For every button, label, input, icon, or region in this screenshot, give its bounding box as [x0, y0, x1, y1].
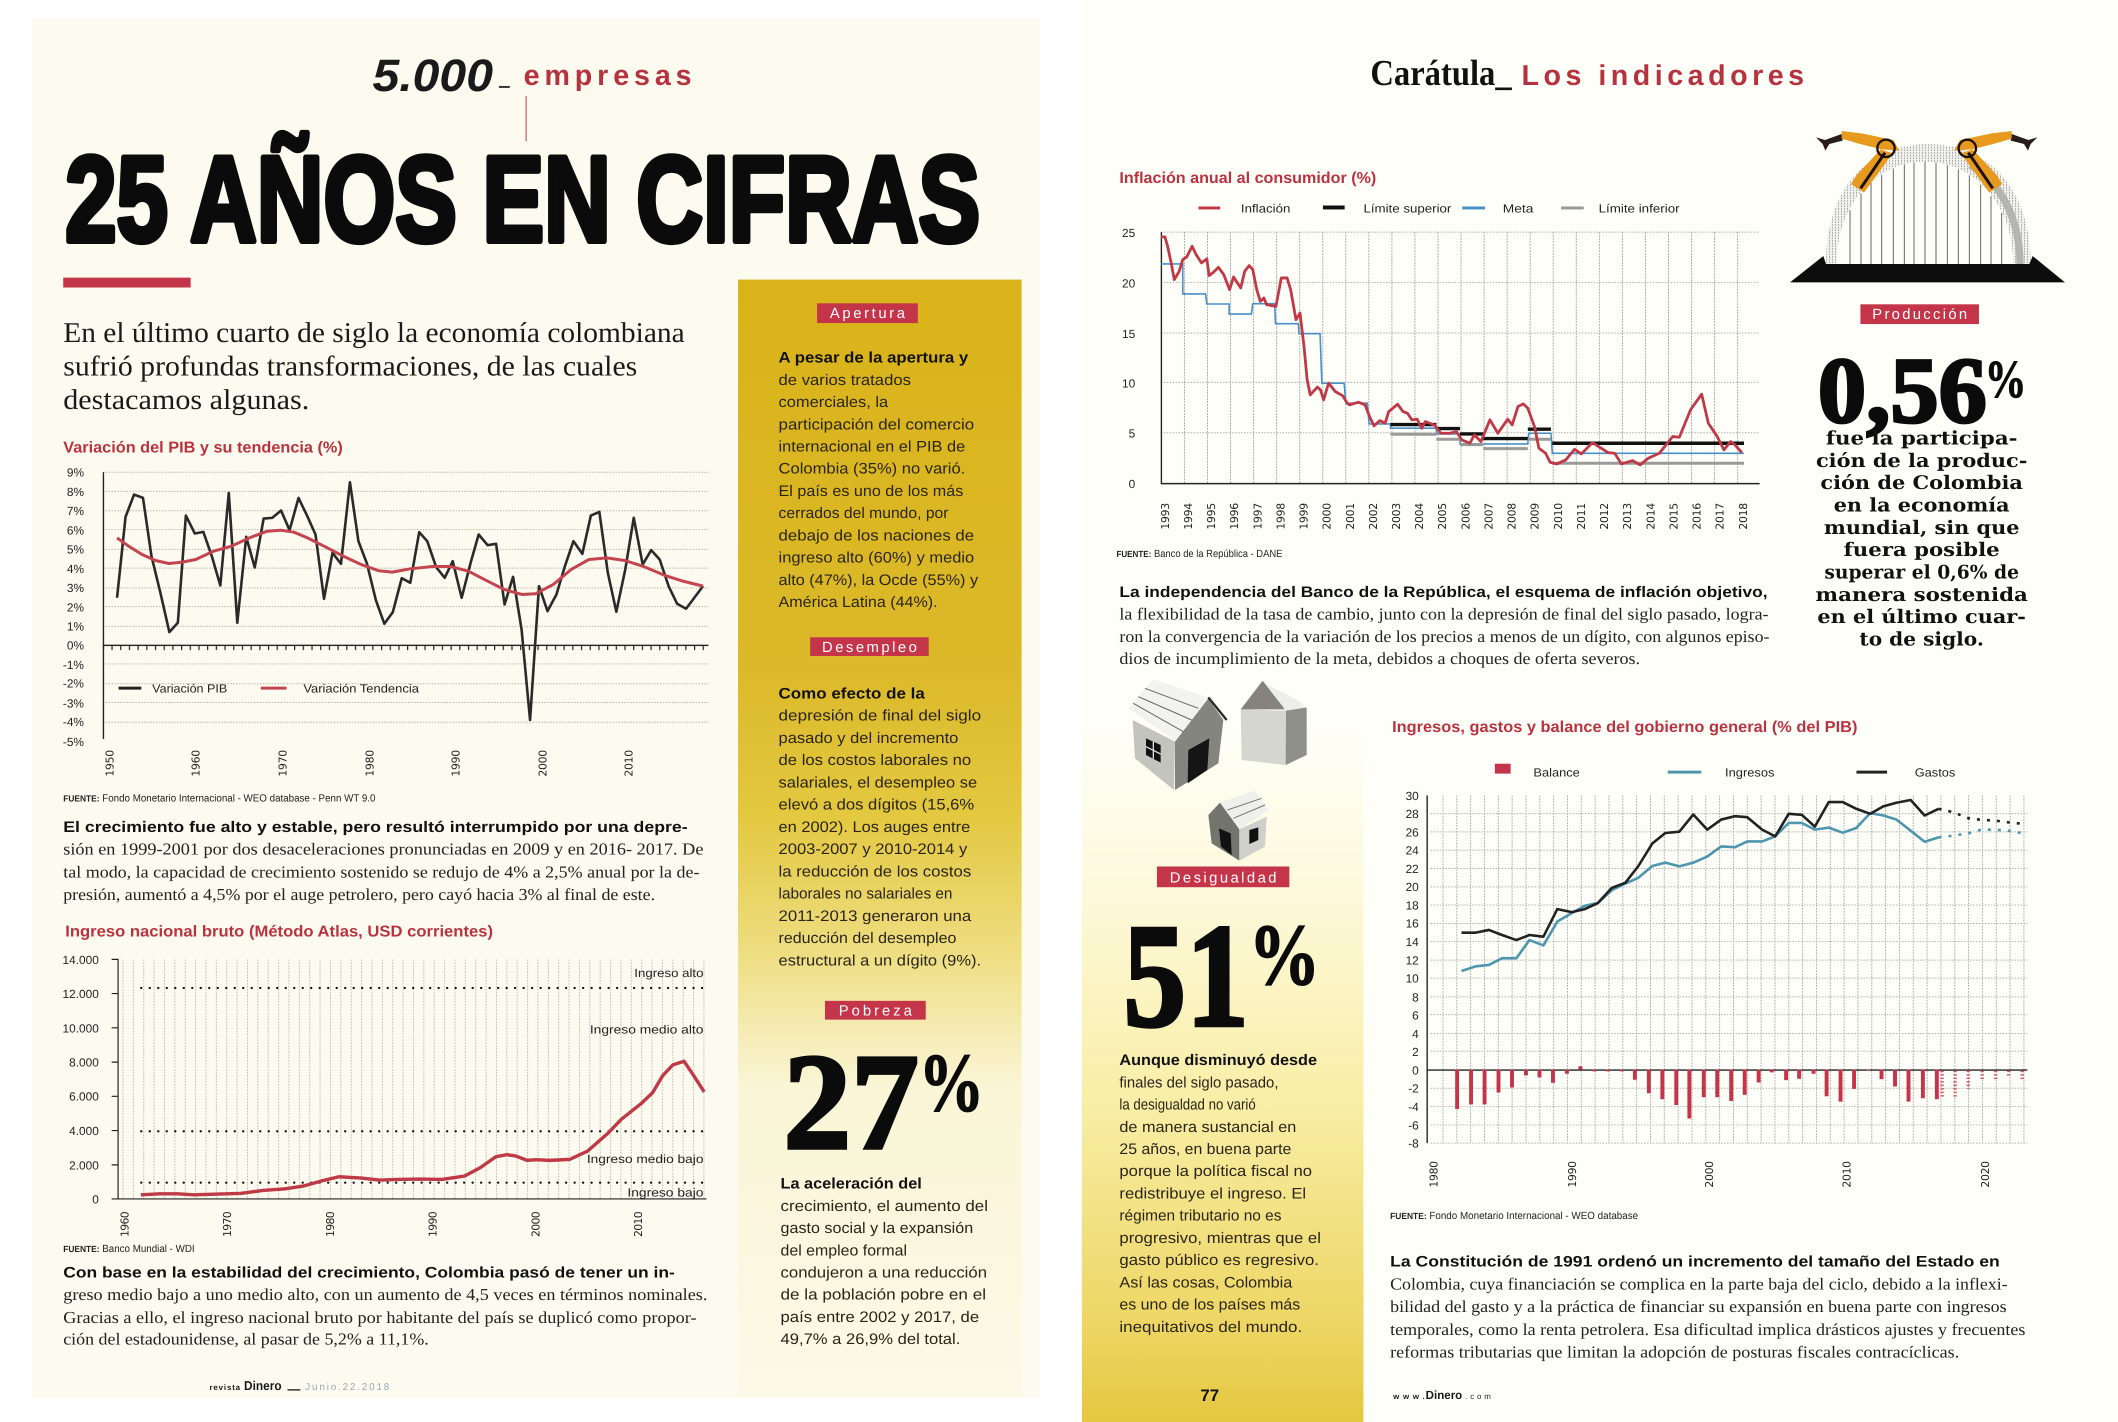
year labels: 1990 — [450, 750, 462, 777]
second house — [1241, 681, 1307, 765]
y axis labels: 10 — [1122, 376, 1136, 390]
y axis labels: 20 — [1122, 277, 1136, 290]
text: desempleo: de los costos laborales no — [779, 752, 971, 769]
big number: 51%: 51 — [1123, 894, 1249, 1058]
text: pobreza: del empleo formal — [781, 1242, 907, 1259]
y axis labels: 4% — [67, 562, 84, 576]
text: desigualdad: porque la política fiscal no — [1119, 1163, 1312, 1180]
income band labels: Ingreso medio bajo — [587, 1152, 704, 1166]
big number: 27% — [783, 1027, 984, 1179]
body text: ingreso: ción del estadounidense, al pasar de 5,2% a 11,1%. — [63, 1330, 429, 1349]
text: desigualdad: es uno de los países más — [1119, 1297, 1300, 1314]
year labels: 1950 — [104, 750, 117, 777]
body text: crecimiento: sión en 1999-2001 por dos desaceleraciones pronunciadas en 2009 y en 2016- 2017. De — [63, 840, 703, 859]
year labels: 2010 — [1841, 1161, 1853, 1188]
text: apertura: El país es uno de los más — [779, 483, 964, 500]
year labels — [1159, 503, 1750, 530]
body text: crecimiento: El crecimiento fue alto y estable, pero resultó interrumpido por una depre- — [63, 819, 688, 836]
body text: constitución — [1390, 1254, 2025, 1361]
y axis labels: 14 — [1406, 935, 1419, 949]
text: desempleo: elevó a dos dígitos (15,6% — [779, 797, 974, 814]
chart legend: inflación: Inflación — [1241, 202, 1290, 215]
tag: Desigualdad — [1157, 866, 1289, 887]
text: desempleo: laborales no salariales en — [779, 886, 952, 903]
big number: 27%: % — [919, 1037, 984, 1129]
year labels: 1990 — [1566, 1161, 1579, 1188]
text: desigualdad: redistribuye el ingreso. El — [1119, 1186, 1306, 1202]
income band labels: Ingreso medio alto — [590, 1023, 704, 1036]
year labels: 2000 — [1321, 503, 1334, 530]
body text: inflación: dios de incumplimiento de la meta, debidos a choques de oferta severos. — [1119, 649, 1640, 668]
y axis labels: 0 — [1129, 477, 1136, 491]
text: desigualdad: progresivo, mientras que el — [1119, 1230, 1321, 1247]
y axis labels: 28 — [1406, 807, 1419, 821]
big number: 51%: % — [1249, 908, 1320, 1004]
illustration: houses — [1128, 679, 1307, 861]
intro text: En el último cuarto de siglo la economía colombiana — [63, 317, 685, 349]
footer: www.Dinero.com: www. — [1392, 1392, 1425, 1401]
year labels: 2014 — [1644, 503, 1657, 530]
text: pobreza: La aceleración del — [781, 1176, 922, 1193]
y axis labels: 4 — [1412, 1027, 1419, 1041]
panel: right page paper — [1082, 0, 2118, 1422]
chart legend: inflación — [1198, 202, 1680, 215]
tag: Pobreza — [825, 1001, 926, 1020]
year labels: 2009 — [1529, 503, 1542, 530]
text: apertura: alto (47%), la Ocde (55%) y — [779, 572, 978, 589]
tag: Producción — [1860, 304, 1979, 324]
year labels: 2020 — [1979, 1161, 1992, 1188]
year labels: 2002 — [1367, 503, 1380, 530]
section header: 5.000 empresas: 5.000 — [372, 49, 493, 101]
year labels: 2015 — [1668, 503, 1680, 530]
y axis labels: 22 — [1406, 862, 1419, 876]
chart legend: gobierno: Ingresos — [1725, 766, 1774, 780]
chart legend: gobierno — [1495, 764, 1955, 780]
year labels: 1980 — [364, 750, 376, 777]
year labels: 2003 — [1390, 503, 1403, 530]
source note: FUENTE: Fondo Monetario Internacional - WEO database - Penn WT 9.0 — [63, 792, 376, 804]
tag: Desigualdad: Desigualdad — [1170, 869, 1276, 886]
y axis labels: 8 — [1412, 990, 1419, 1004]
text: apertura: ingreso alto (60%) y medio — [779, 550, 974, 567]
year labels: 1970 — [221, 1211, 234, 1237]
big number: 0,56%: % — [1985, 350, 2026, 409]
y axis labels: 2% — [67, 601, 84, 615]
y axis labels: 26 — [1406, 825, 1419, 839]
tag: Apertura: Apertura — [830, 305, 906, 322]
text: desigualdad: de manera sustancial en — [1119, 1119, 1296, 1136]
y axis labels: -1% — [63, 658, 84, 672]
text: producción: ción de la produc- — [1816, 450, 2027, 472]
year labels: 2005 — [1436, 503, 1449, 530]
footer: revista Dinero: Junio.22.2018 — [305, 1382, 390, 1393]
text: apertura: comerciales, la — [779, 394, 889, 411]
footer: revista Dinero — [209, 1378, 390, 1393]
body text: constitución: La Constitución de 1991 ordenó un incremento del tamaño del Estado en — [1390, 1254, 2000, 1271]
year labels: 2010 — [1552, 503, 1565, 530]
year labels: 1996 — [1228, 503, 1241, 530]
panel: yellow sidebar — [738, 280, 1022, 1398]
text: desigualdad: finales del siglo pasado, — [1119, 1074, 1278, 1091]
y axis labels: -8 — [1408, 1137, 1419, 1151]
illustration: dome with robot arms — [1790, 131, 2065, 282]
y axis labels: 10.000 — [63, 1021, 99, 1035]
y axis labels: 9% — [67, 466, 84, 480]
y axis labels: 0 — [92, 1193, 99, 1206]
y axis labels: 12 — [1406, 953, 1419, 967]
year labels: 2012 — [1598, 503, 1611, 530]
text: desempleo: pasado y del incremento — [779, 730, 958, 747]
body text: inflación: La independencia del Banco de la República, el esquema de inflación objetivo, — [1119, 584, 1768, 601]
footer: www.Dinero.com: Dinero — [1426, 1388, 1462, 1402]
text: desigualdad — [1119, 1052, 1321, 1336]
body text: constitución: temporales, como la renta petrolera. Esa dificultad implica drásticos ajustes y frecuentes — [1390, 1320, 2025, 1339]
text: apertura: debajo de los naciones de — [779, 528, 974, 544]
text: desigualdad: 25 años, en buena parte — [1119, 1141, 1291, 1158]
y axis labels — [1122, 226, 1136, 491]
panel: yellow fade column — [1082, 711, 1363, 1422]
text: pobreza: de la población pobre en el — [781, 1287, 986, 1304]
tag: Producción: Producción — [1872, 306, 1967, 323]
text: pobreza: gasto social y la expansión — [781, 1220, 973, 1237]
tag: Apertura — [817, 303, 918, 323]
section header: Carátula Los indicadores: Carátula_ — [1370, 53, 1512, 94]
section header: Carátula Los indicadores: Los indicadores — [1522, 60, 1804, 92]
text: producción: manera sostenida — [1815, 584, 2028, 606]
line chart: inflación — [1122, 226, 1760, 530]
y axis labels: 15 — [1122, 327, 1136, 341]
text: desempleo: 2011-2013 generaron una — [779, 908, 972, 925]
source note: FUENTE: Fondo Monetario Internacional - WEO database — [1390, 1210, 1638, 1222]
y axis labels: -2% — [63, 677, 84, 691]
text: producción: en la economía — [1834, 495, 2010, 517]
text: producción: fuera posible — [1844, 539, 2000, 561]
footer: revista Dinero: Dinero — [244, 1378, 282, 1393]
section header: 5.000 empresas: empresas — [524, 60, 692, 92]
body text: constitución: reformas tributarias que limitan la adopción de posturas fiscales contracíclicas. — [1390, 1343, 1959, 1361]
y axis labels: 16 — [1406, 917, 1419, 931]
year labels: 1960 — [119, 1211, 131, 1237]
text: apertura — [779, 350, 978, 611]
body text: ingreso — [63, 1265, 707, 1349]
robot arm left — [1816, 131, 1899, 193]
y axis labels: 8.000 — [69, 1056, 99, 1070]
year labels: 2016 — [1691, 503, 1704, 530]
text: producción: mundial, sin que — [1824, 517, 2019, 539]
body text: ingreso: Gracias a ello, el ingreso nacional bruto por habitante del país se duplicó como propor- — [63, 1308, 697, 1327]
text: pobreza: crecimiento, el aumento del — [781, 1198, 988, 1215]
y axis labels: 24 — [1406, 844, 1419, 858]
year labels: 1994 — [1182, 503, 1195, 530]
text: desigualdad: la desigualdad no varió — [1119, 1097, 1256, 1113]
intro text: sufrió profundas transformaciones, de las cuales — [63, 351, 637, 382]
footer: www.Dinero.com: .com — [1465, 1392, 1491, 1401]
footer: revista Dinero: revista — [209, 1383, 241, 1392]
year labels: 1995 — [1205, 503, 1218, 530]
source note: FUENTE: Banco Mundial - WDI — [63, 1243, 195, 1255]
year labels: 1997 — [1251, 503, 1264, 530]
text: desempleo: la reducción de los costos — [779, 864, 971, 880]
income band labels — [587, 966, 704, 1199]
body text: crecimiento: presión, aumentó a 4,5% por el auge petrolero, pero cayó hacia 3% al final de este. — [63, 885, 655, 904]
year labels — [119, 1211, 645, 1237]
y axis labels: 6% — [67, 524, 84, 537]
text: desempleo — [779, 686, 981, 969]
chart heading: inflación: Inflación anual al consumidor (%) — [1119, 170, 1376, 187]
y axis labels: 6 — [1412, 1009, 1419, 1023]
y axis labels: -2 — [1408, 1082, 1419, 1096]
body text: constitución: Colombia, cuya financiación se complica en la parte baja del ciclo, debido a la inflexi- — [1390, 1275, 2008, 1293]
big number: 0,56%: 0,56 — [1818, 338, 1987, 443]
footer: www.Dinero.com — [1392, 1388, 1491, 1402]
title: 25 AÑOS EN CIFRAS — [65, 132, 980, 268]
year labels: 2001 — [1344, 503, 1357, 530]
y axis labels: 1% — [67, 619, 84, 633]
year labels: 2000 — [536, 750, 549, 777]
y axis labels — [63, 953, 99, 1206]
y axis labels: 6.000 — [69, 1090, 99, 1104]
section header: 5.000 empresas — [372, 49, 692, 141]
year labels: 2007 — [1483, 503, 1495, 530]
chart legend: gobierno: Balance — [1533, 766, 1580, 780]
y axis labels: 12.000 — [63, 987, 99, 1001]
text: desempleo: en 2002). Los auges entre — [779, 819, 970, 836]
text: desempleo: reducción del desempleo — [779, 930, 956, 947]
y axis labels: -3% — [63, 697, 84, 710]
text: apertura: de varios tratados — [779, 372, 911, 389]
year labels: 2010 — [632, 1211, 645, 1237]
text: producción: ción de Colombia — [1820, 472, 2023, 494]
y axis labels: 5% — [67, 542, 84, 556]
text: producción: to de siglo. — [1859, 629, 1984, 650]
text: apertura: cerrados del mundo, por — [779, 505, 948, 522]
year labels: 1999 — [1298, 503, 1310, 530]
year labels: 1980 — [324, 1211, 337, 1237]
y axis labels: 14.000 — [63, 953, 99, 967]
body text: ingreso: Con base en la estabilidad del crecimiento, Colombia pasó de tener un in- — [63, 1265, 675, 1281]
text: apertura: A pesar de la apertura y — [779, 350, 969, 367]
text: desempleo: estructural a un dígito (9%). — [779, 952, 981, 969]
text: apertura: Colombia (35%) no varió. — [779, 461, 965, 478]
year labels: 2000 — [1703, 1161, 1716, 1188]
year labels: 1993 — [1159, 503, 1172, 530]
y axis labels: 0% — [67, 639, 84, 653]
text: apertura: participación del comercio — [779, 416, 974, 433]
y axis labels — [1406, 789, 1419, 1151]
year labels: 2000 — [530, 1211, 542, 1237]
tag: Pobreza: Pobreza — [839, 1003, 913, 1020]
text: desigualdad: régimen tributario no es — [1119, 1208, 1282, 1225]
text: pobreza: condujeron a una reducción — [781, 1265, 987, 1281]
body text: crecimiento: tal modo, la capacidad de crecimiento sostenido se redujo de 4% a 2,5% anual por la de- — [63, 863, 700, 881]
year labels: 2004 — [1413, 503, 1426, 530]
combo chart: ingresos, gastos, balance — [1406, 789, 2027, 1188]
y axis labels: 30 — [1406, 789, 1419, 803]
data lines — [117, 482, 703, 720]
y axis labels: -4% — [63, 715, 84, 729]
chart heading: ingreso: Ingreso nacional bruto (Método Atlas, USD corrientes) — [65, 924, 493, 941]
text: desempleo: salariales, el desempleo se — [779, 775, 977, 791]
y axis labels: 10 — [1406, 972, 1419, 986]
body text: inflación: ron la convergencia de la variación de los precios a menos de un dígito, con algunos episo- — [1119, 627, 1770, 646]
y axis labels: -4 — [1408, 1100, 1419, 1114]
text: desempleo: 2003-2007 y 2010-2014 y — [779, 841, 968, 858]
section header: Carátula Los indicadores — [1370, 53, 1804, 94]
red accent bar — [63, 278, 191, 288]
y axis labels: 2.000 — [69, 1158, 99, 1172]
y axis labels: -6 — [1408, 1118, 1419, 1132]
legend: Variación PIB — [152, 682, 227, 696]
line chart: variación del PIB — [63, 466, 708, 777]
body text: ingreso: greso medio bajo a uno medio alto, con un aumento de 4,5 veces en términos nominales. — [63, 1285, 707, 1304]
chart legend: gobierno: Gastos — [1915, 766, 1955, 780]
chart heading: PIB: Variación del PIB y su tendencia (%) — [63, 440, 343, 456]
text: pobreza — [781, 1176, 988, 1348]
text: desempleo: Como efecto de la — [779, 686, 925, 702]
legend — [119, 682, 419, 696]
body text: crecimiento — [63, 819, 703, 904]
text: desigualdad: inequitativos del mundo. — [1119, 1319, 1302, 1336]
page number: 77 — [1200, 1386, 1219, 1405]
year labels — [104, 750, 635, 777]
big house — [1128, 679, 1227, 790]
y axis labels: 20 — [1406, 880, 1419, 894]
y axis labels — [63, 466, 84, 749]
year labels: 2006 — [1459, 503, 1472, 530]
text: producción: superar el 0,6% de — [1824, 562, 2019, 584]
y axis labels: 2 — [1412, 1045, 1419, 1059]
year labels: 1970 — [277, 750, 289, 777]
legend: Variación Tendencia — [303, 682, 419, 696]
chart legend: inflación: Meta — [1503, 202, 1534, 215]
year labels: 1998 — [1275, 503, 1287, 530]
small house — [1208, 791, 1268, 861]
text: producción: en el último cuar- — [1817, 606, 2026, 628]
year labels — [1428, 1161, 1992, 1188]
intro text: destacamos algunas. — [63, 384, 309, 416]
income band labels: Ingreso bajo — [627, 1186, 704, 1199]
y axis labels: 4.000 — [69, 1124, 99, 1138]
body text: inflación: la flexibilidad de la tasa de cambio, junto con la depresión de final del siglo pasado, logra- — [1119, 605, 1769, 623]
year labels: 2018 — [1737, 503, 1750, 530]
text: pobreza: 49,7% a 26,9% del total. — [781, 1331, 960, 1348]
year labels: 2017 — [1714, 503, 1727, 530]
y axis labels: 18 — [1406, 899, 1419, 912]
black base — [1790, 256, 2065, 282]
text: producción — [1815, 428, 2028, 650]
body text: constitución: bilidad del gasto y a la práctica de financiar su expansión en buena parte con ingresos — [1390, 1297, 2007, 1316]
y axis labels: 0 — [1412, 1064, 1419, 1077]
chart heading: gobierno: Ingresos, gastos y balance del gobierno general (% del PIB) — [1392, 719, 1857, 736]
year labels: 2010 — [622, 750, 635, 777]
text: producción: fue la participa- — [1826, 428, 2017, 450]
text: desigualdad: gasto público es regresivo. — [1119, 1252, 1319, 1269]
tag: Desempleo: Desempleo — [822, 639, 917, 656]
year labels: 2008 — [1506, 503, 1519, 530]
income band labels: Ingreso alto — [634, 966, 704, 980]
balance bars — [1455, 1066, 1939, 1118]
year labels: 1960 — [190, 750, 203, 777]
y axis labels: 5 — [1129, 427, 1136, 441]
text: apertura: internacional en el PIB de — [779, 439, 965, 455]
body text: inflación — [1119, 584, 1770, 668]
panel: left page paper — [33, 18, 1039, 1398]
y axis labels: 25 — [1122, 226, 1136, 240]
year labels: 2011 — [1575, 503, 1588, 530]
y axis labels: 7% — [67, 504, 84, 518]
y axis labels: 8% — [67, 485, 84, 499]
year labels: 2013 — [1621, 503, 1634, 530]
chart legend: inflación: Límite superior — [1363, 202, 1451, 215]
robot arm right — [1954, 131, 2037, 193]
line chart: ingreso nacional bruto — [63, 953, 706, 1237]
big number: 27%: 27 — [783, 1027, 919, 1179]
text: desigualdad: Aunque disminuyó desde — [1119, 1052, 1317, 1069]
y axis labels: -5% — [63, 735, 84, 749]
text: apertura: América Latina (44%). — [779, 594, 938, 611]
text: desempleo: depresión de final del siglo — [779, 708, 981, 725]
text: desigualdad: Así las cosas, Colombia — [1119, 1275, 1293, 1291]
dome — [1826, 144, 2031, 264]
year labels: 1980 — [1428, 1161, 1441, 1188]
intro text — [63, 317, 685, 416]
year labels: 1990 — [427, 1211, 440, 1237]
y axis labels: 3% — [67, 581, 84, 595]
text: pobreza: país entre 2002 y 2017, de — [781, 1309, 979, 1326]
source note: FUENTE: Banco de la República - DANE — [1116, 548, 1282, 560]
chart legend: inflación: Límite inferior — [1599, 202, 1680, 215]
